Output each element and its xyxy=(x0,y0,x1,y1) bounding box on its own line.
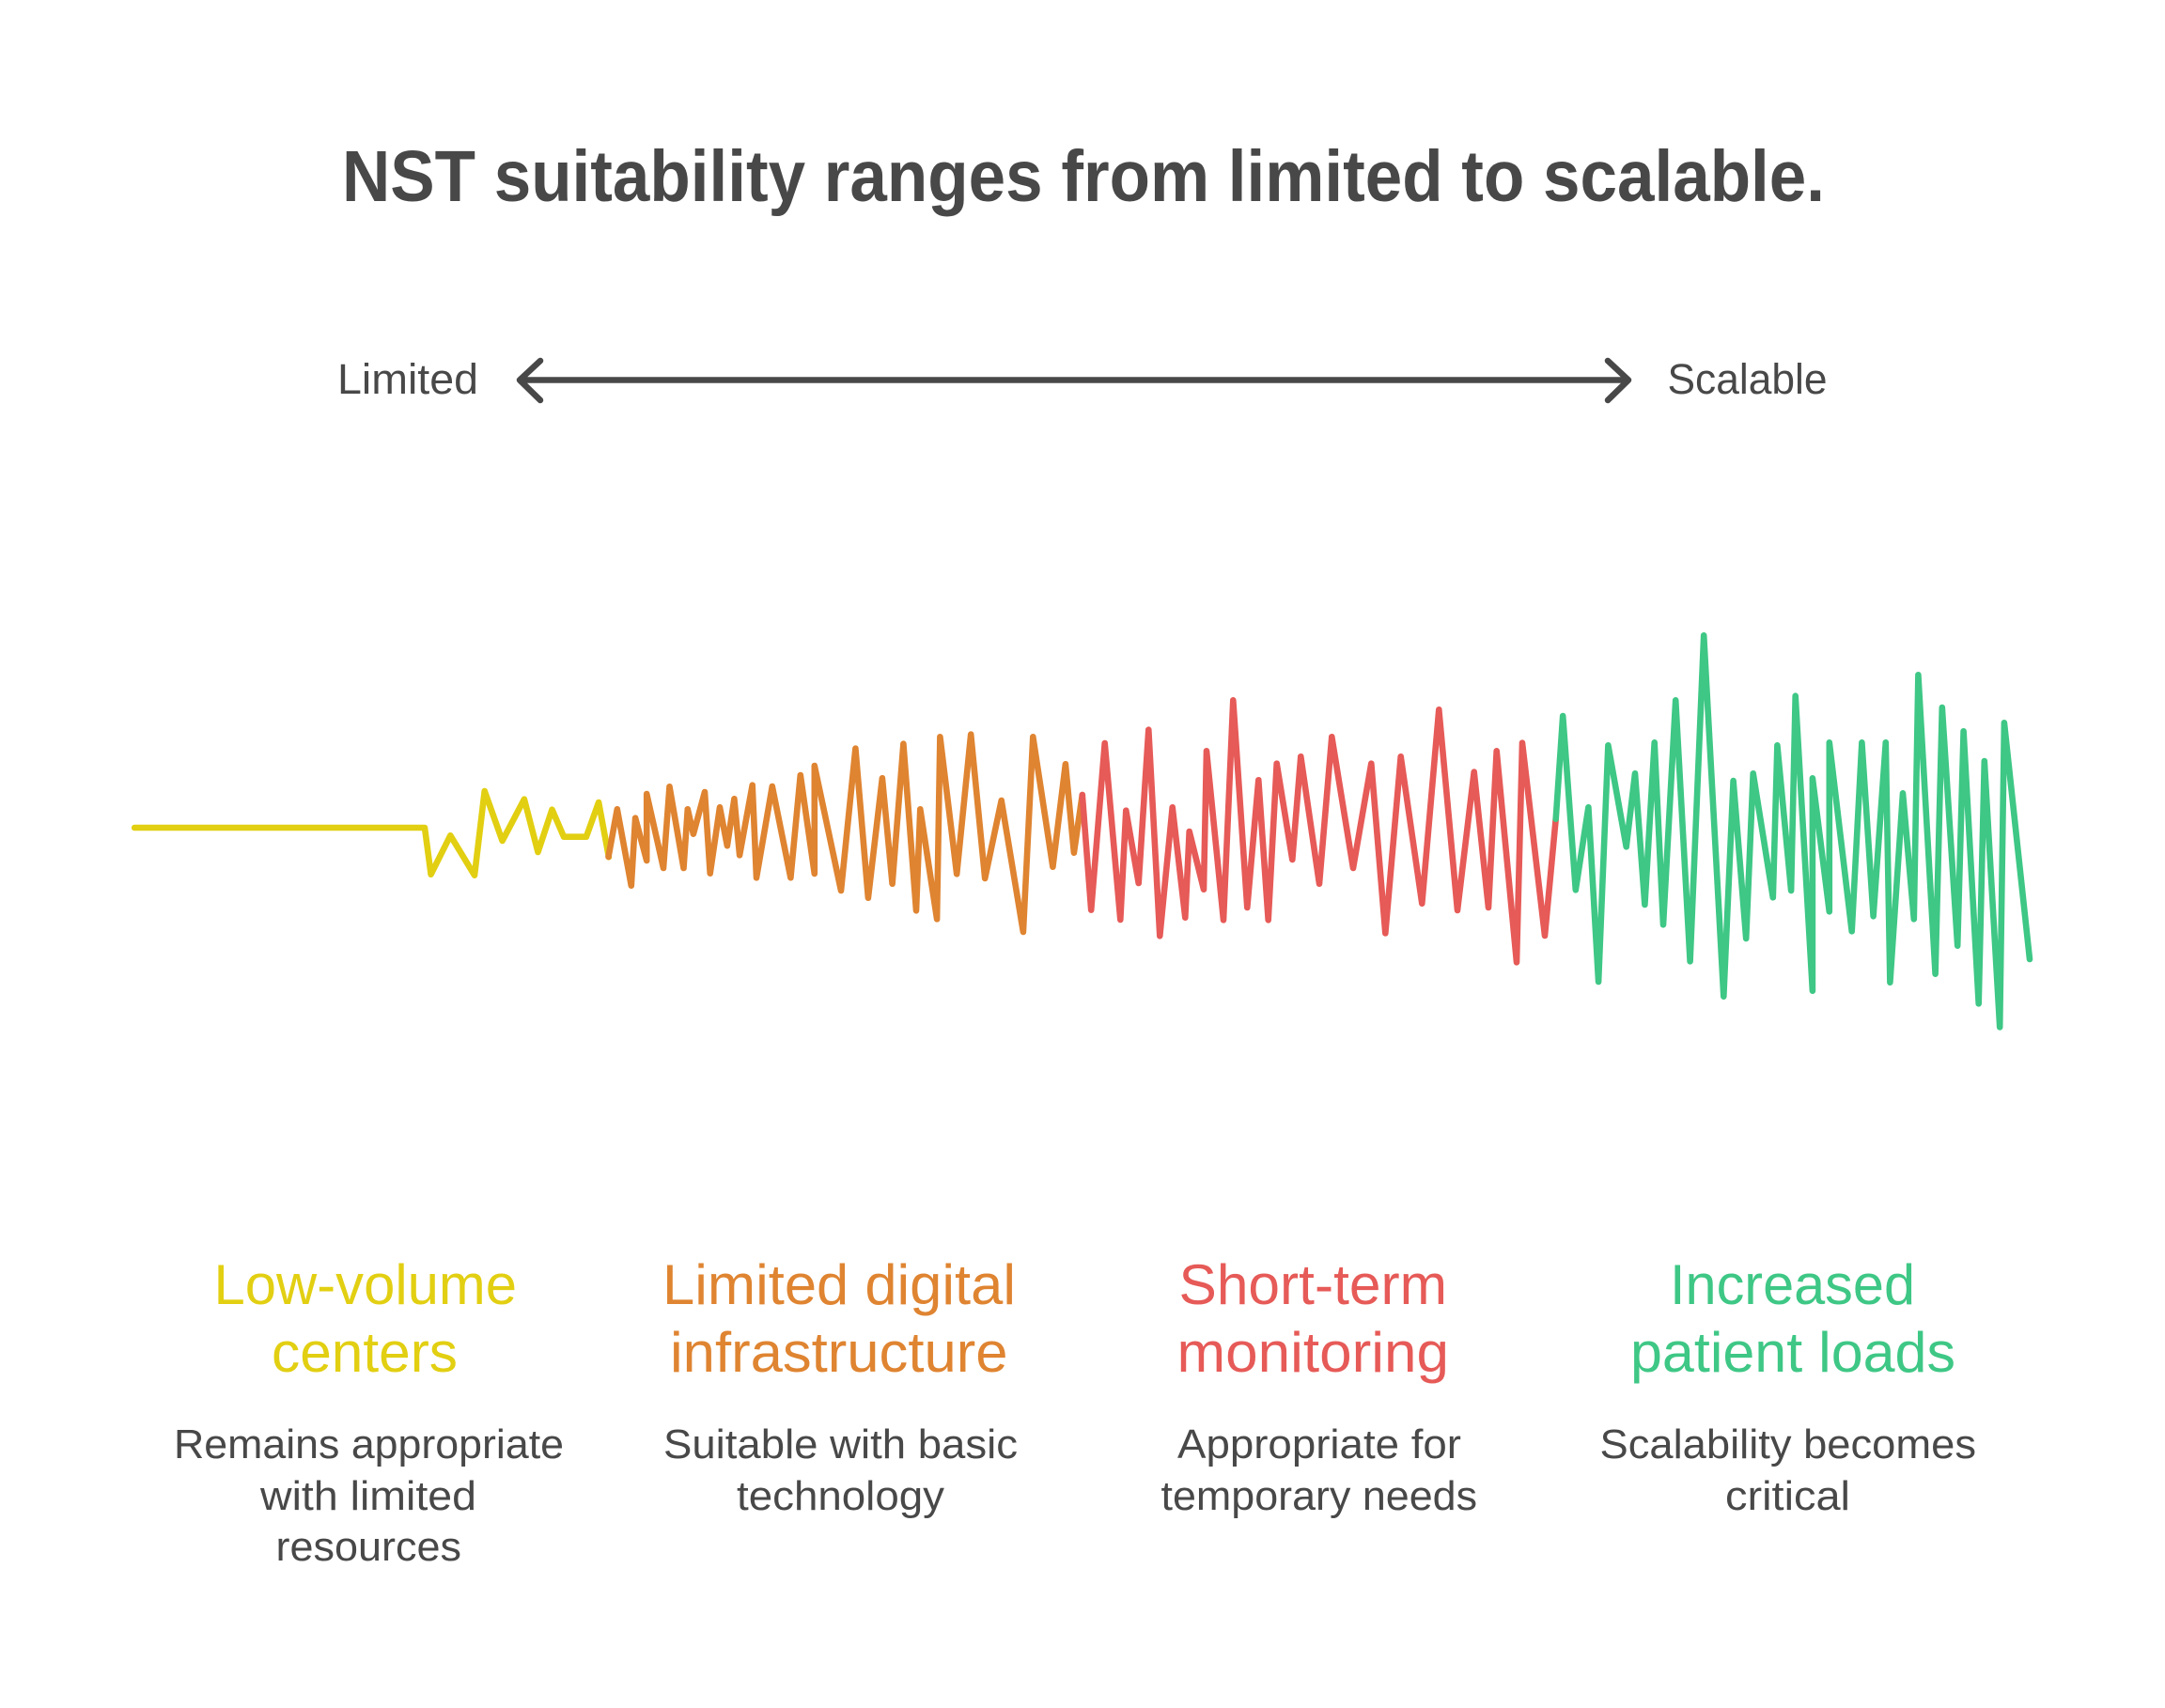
heading: low-volume centers xyxy=(214,1253,517,1384)
panel: limited digital infrastructure xyxy=(662,1253,1018,1519)
panel: short-term monitoring xyxy=(1161,1253,1477,1519)
icon: double-headed arrow xyxy=(520,361,1628,400)
text block: limited digital description: Suitable with basic xyxy=(663,1421,1018,1467)
text block: limited digital description: technology xyxy=(737,1473,944,1519)
scale axis: limited to scalable xyxy=(337,355,1827,403)
heading: increased patient loads: Increased xyxy=(1670,1253,1915,1316)
waveform segment: increased patient loads xyxy=(1556,635,2030,1027)
heading: increased patient loads: patient loads xyxy=(1630,1321,1955,1384)
text block: increased loads description: Scalability becomes xyxy=(1599,1421,1976,1467)
title: NST suitability ranges from limited to scalable. xyxy=(342,136,1825,217)
heading: short-term monitoring: Short-term xyxy=(1178,1253,1447,1316)
waveform segment: limited digital infrastructure xyxy=(609,735,1082,932)
heading: low-volume centers: Low-volume xyxy=(214,1253,517,1316)
axis label: Scalable: Scalable xyxy=(1667,355,1827,403)
panel: low-volume centers xyxy=(174,1253,564,1570)
waveform segment: low-volume centers xyxy=(134,791,609,876)
text block: short-term description: temporary needs xyxy=(1161,1473,1477,1519)
axis label: Limited: Limited xyxy=(337,355,478,403)
panel: increased patient loads xyxy=(1599,1253,1976,1519)
heading: limited digital infrastructure: Limited digital xyxy=(662,1253,1016,1316)
text block: low-volume description xyxy=(174,1421,564,1570)
heading: limited digital infrastructure: infrastructure xyxy=(670,1321,1007,1384)
heading: limited digital infrastructure xyxy=(662,1253,1016,1384)
text block: limited digital description xyxy=(663,1421,1018,1519)
text block: low-volume description: Remains appropriate xyxy=(174,1421,564,1467)
text block: low-volume description: resources xyxy=(276,1524,461,1570)
heading: low-volume centers: centers xyxy=(272,1321,458,1384)
chart: waveform of four segments xyxy=(134,635,2030,1027)
text block: low-volume description: with limited xyxy=(259,1473,476,1519)
heading: short-term monitoring xyxy=(1176,1253,1449,1384)
text block: increased loads description: critical xyxy=(1725,1473,1850,1519)
text block: short-term description xyxy=(1161,1421,1477,1519)
text block: short-term description: Appropriate for xyxy=(1177,1421,1461,1467)
waveform segment: short-term monitoring xyxy=(1082,700,1556,962)
heading: increased patient loads xyxy=(1630,1253,1955,1384)
heading: short-term monitoring: monitoring xyxy=(1176,1321,1449,1384)
text block: increased loads description xyxy=(1599,1421,1976,1519)
